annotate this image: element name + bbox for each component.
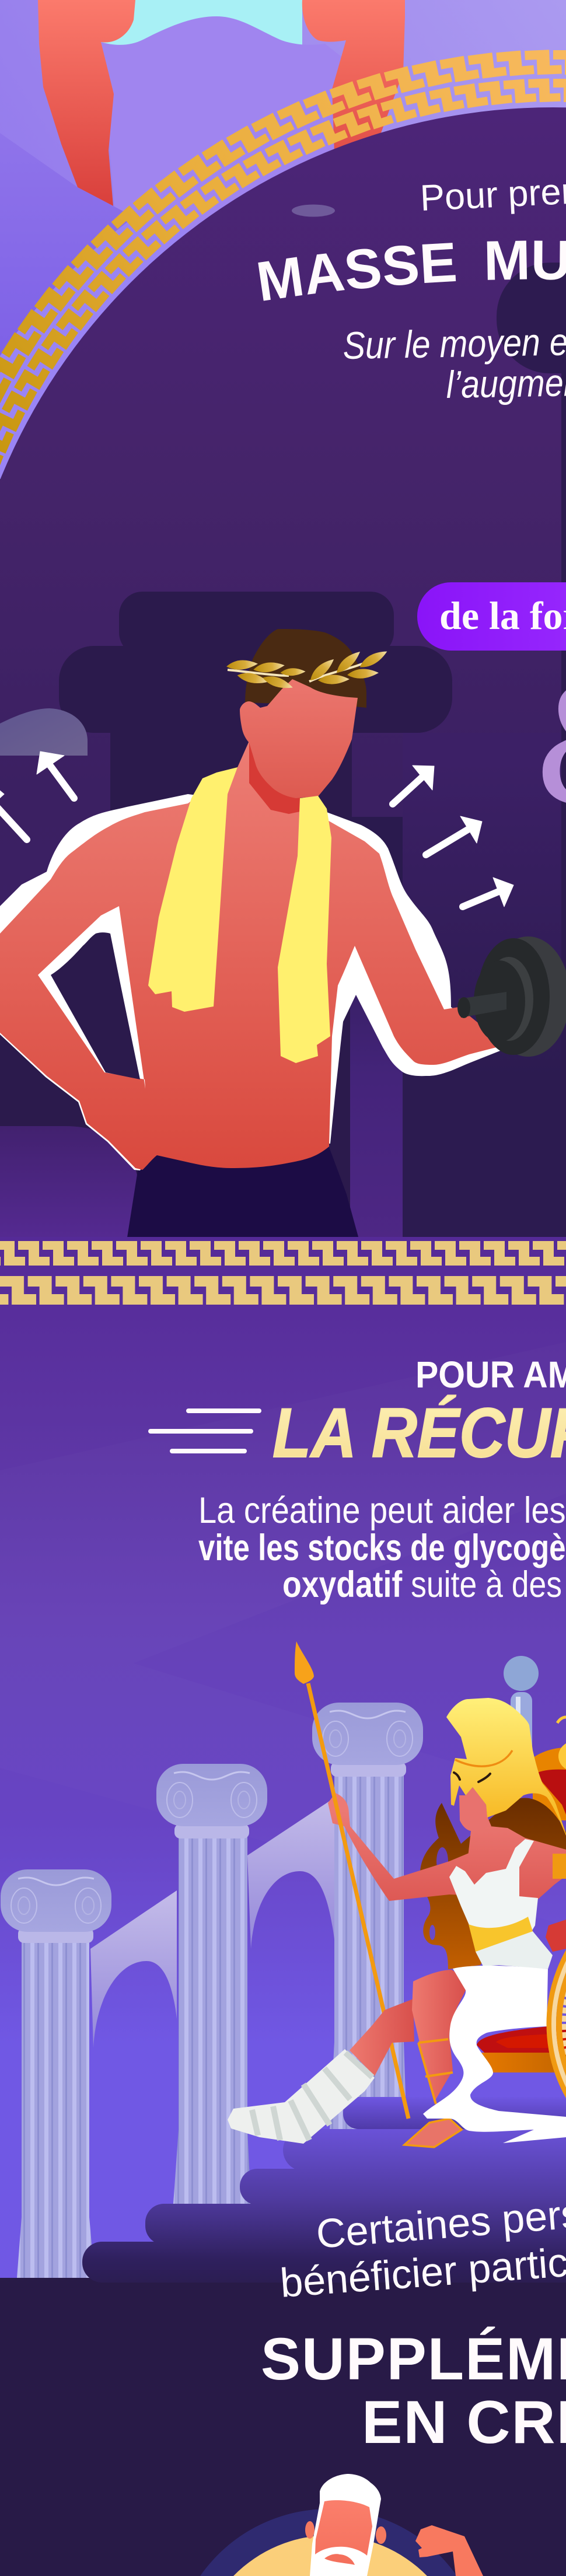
panel: dark purple arch bbox=[0, 107, 566, 1301]
flexed arm bbox=[415, 2525, 483, 2576]
stone steps bbox=[82, 2129, 566, 2283]
white hair and beard bbox=[310, 2474, 381, 2576]
lower bodice bbox=[476, 1931, 553, 1969]
white outline bbox=[0, 794, 509, 1170]
seated leg bbox=[412, 1970, 466, 2102]
panel: sky background bbox=[0, 0, 566, 525]
red cushion bbox=[477, 2025, 566, 2053]
throne base bbox=[473, 2053, 566, 2072]
small ellipse highlight bbox=[292, 204, 335, 217]
columns and arches bbox=[1, 1703, 423, 2278]
helmet eye slits bbox=[454, 1773, 490, 1782]
bottom dark floor bbox=[0, 2278, 566, 2576]
hair gap lower bbox=[429, 1925, 435, 1940]
white bodice bbox=[449, 1839, 538, 1937]
throne knob bbox=[504, 1656, 539, 1762]
throne gold ornament bbox=[558, 1741, 566, 1771]
arm holding spear bbox=[328, 1793, 508, 1901]
goddess athena with spear and shield bbox=[228, 1641, 566, 2172]
right background column bbox=[403, 733, 561, 1241]
sandal straps bbox=[418, 2039, 453, 2104]
laurel wreath bbox=[226, 647, 389, 691]
armband bbox=[553, 1854, 566, 1879]
face bbox=[459, 1787, 491, 1831]
skin body bbox=[0, 741, 505, 1170]
heading: supplementation en creatine bbox=[261, 2326, 566, 2456]
yellow towel right bbox=[278, 796, 331, 1063]
hair gap bbox=[436, 1847, 448, 1875]
dumbbell bbox=[457, 936, 566, 1057]
greek key arc border bbox=[0, 50, 566, 466]
shin behind bbox=[350, 1999, 414, 2076]
background column with man bbox=[59, 592, 452, 1243]
helmet bbox=[446, 1698, 566, 1836]
arch two bbox=[247, 1797, 336, 1949]
light band under key on the hill bbox=[0, 217, 193, 484]
white skirt bbox=[423, 1966, 566, 2143]
helmet brow line bbox=[455, 1750, 512, 1766]
speed lines icon bbox=[151, 1411, 259, 1451]
man with dumbbell bbox=[0, 629, 566, 1241]
column lighter strip bbox=[350, 817, 403, 1241]
round shield bbox=[549, 1876, 566, 2172]
bandaged leg bbox=[228, 2049, 375, 2144]
foot with sandal bbox=[404, 2119, 462, 2147]
arrows around the man bbox=[0, 752, 513, 907]
throne red inner bbox=[535, 1770, 566, 1815]
gold belt bbox=[469, 1917, 533, 1952]
blue halo bbox=[200, 2509, 457, 2576]
arch one bbox=[90, 1890, 177, 2048]
text: certaines personnes bbox=[278, 2182, 566, 2306]
arm gap shadow bbox=[51, 932, 140, 1079]
stone fragment bbox=[0, 708, 88, 756]
recovery paragraph bbox=[198, 1490, 566, 1605]
face bbox=[315, 2500, 372, 2556]
column left bbox=[1, 1869, 111, 2278]
face bbox=[240, 679, 358, 798]
old man flexing bbox=[200, 2474, 483, 2576]
background column capital at right bbox=[497, 263, 566, 373]
yellow towel left bbox=[148, 767, 237, 1012]
neck and shoulders bbox=[467, 1826, 566, 1902]
intro text bbox=[343, 317, 566, 407]
background column shaft at right bbox=[561, 373, 566, 1243]
yellow shoulders bbox=[233, 2535, 427, 2576]
throne gold horn bbox=[557, 1717, 566, 1723]
greek key border: top row bbox=[0, 1241, 566, 1266]
back hair bbox=[420, 1798, 566, 1969]
throne back bbox=[533, 1747, 566, 1820]
faint diagonal light bands bbox=[0, 1342, 566, 1925]
neck shadow bbox=[249, 741, 301, 814]
ears bbox=[305, 2521, 386, 2544]
hill on the left bbox=[0, 133, 134, 379]
column middle bbox=[156, 1764, 267, 2204]
spear shaft bbox=[308, 1683, 408, 2119]
hair bbox=[245, 629, 366, 708]
mouth bbox=[324, 2554, 355, 2565]
pants bbox=[127, 1147, 359, 1241]
figure: cyan tunic with red hair bbox=[38, 0, 405, 233]
pill: de la force bbox=[417, 582, 566, 651]
panel: lower section background bbox=[0, 1237, 566, 2287]
spear head bbox=[295, 1641, 314, 1684]
left lower dark block bbox=[0, 992, 117, 1132]
top step bbox=[343, 2097, 566, 2129]
left lower purple blob bbox=[0, 1126, 140, 1241]
greek key border: bottom row bbox=[0, 1276, 566, 1305]
column right bbox=[312, 1703, 423, 2130]
other hand bbox=[546, 1920, 566, 1952]
white gap under left arm bbox=[38, 906, 145, 1089]
